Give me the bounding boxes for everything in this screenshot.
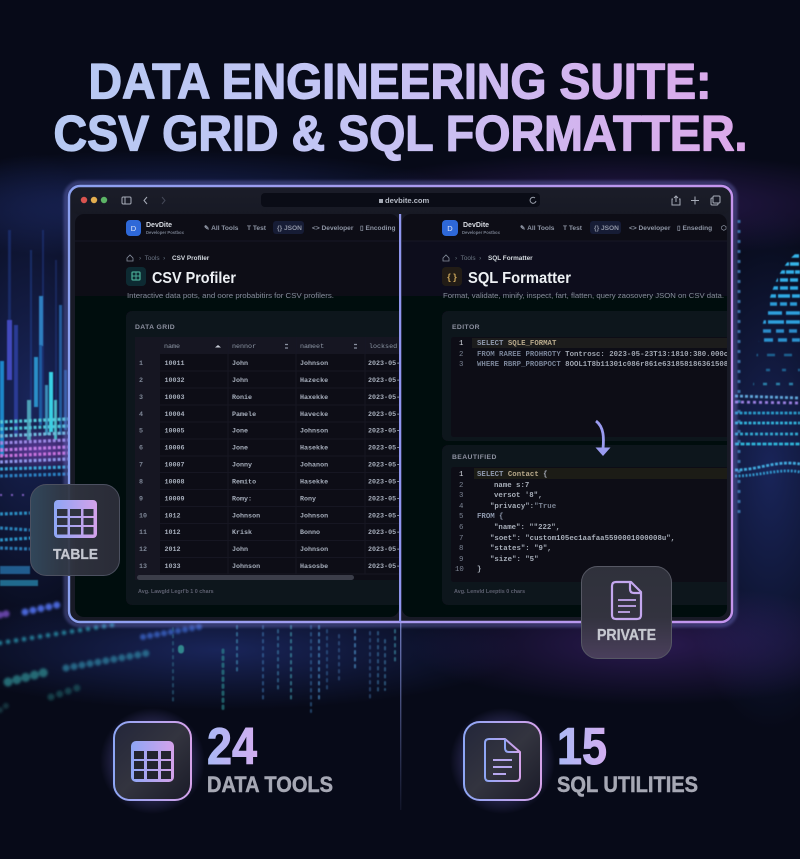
card: beautified: 7 (459, 535, 463, 543)
card: beautified (442, 445, 742, 605)
app header: ⬡ (721, 224, 727, 232)
app header: {} JSON (277, 225, 302, 232)
data table: Romy: (232, 496, 252, 504)
data table: 2023-05- (368, 478, 400, 486)
split divider (399, 214, 401, 622)
card: beautified: "size": "5" (490, 556, 538, 564)
card: beautified: 1 (459, 471, 464, 479)
number: 24: 24 (207, 718, 257, 776)
data table: Pamele (232, 411, 256, 419)
data table: Jonny (232, 462, 252, 470)
app header: <> Developer (629, 225, 671, 232)
data table: nameet (300, 343, 324, 351)
right data visualisation: globe (735, 220, 800, 515)
data table: Johnson (232, 512, 260, 520)
card: beautified: 3 (459, 492, 463, 500)
breadcrumb: CSV Profiler (172, 255, 210, 262)
card: beautified: "name": ""222", (494, 524, 560, 532)
card: beautified: "soet": "custom105ec1aafaa5590001000008u", (490, 535, 675, 543)
data table: Hasekke (300, 444, 328, 452)
card: beautified: name s:7 (494, 482, 529, 490)
data table: 2 (139, 377, 143, 385)
heading: SQL Formatter: SQL Formatter (468, 270, 571, 287)
breadcrumb (443, 255, 533, 262)
icon: table (54, 500, 97, 538)
app header (126, 220, 396, 236)
data table: 11 (139, 529, 147, 537)
data table: John (232, 377, 248, 385)
card: beautified: 6 (459, 524, 463, 532)
card: beautified: 4 (459, 503, 464, 511)
center divider line (400, 620, 401, 810)
browser toolbar: devbite.com (385, 196, 430, 205)
data table: 3 (139, 394, 143, 402)
card: editor: FROM RAREE PROHROTY Tontrosc: 2023-05-23T13:1810:380.000c (477, 351, 728, 359)
data table: 2023-05- (368, 411, 400, 419)
data table: John (232, 546, 248, 554)
data table: 2023-05- (368, 546, 400, 554)
data table: Johnson (300, 512, 328, 520)
breadcrumb: SQL Formatter (488, 255, 533, 262)
card: data grid: DATA GRID (135, 324, 175, 331)
badge: TABLE: TABLE (53, 546, 98, 563)
app header: ▯ Enseding (677, 225, 712, 232)
data table: 2012 (164, 546, 181, 554)
data table: Jone (232, 428, 248, 436)
data table: 1012 (164, 512, 181, 520)
data table: Rony (300, 496, 316, 504)
card: beautified: SELECT Contact { (477, 471, 548, 479)
breadcrumb: › Tools › (139, 255, 165, 262)
data table: Johanon (300, 462, 328, 470)
data table: 2023-05- (368, 496, 400, 504)
data table: 2023-05- (368, 394, 400, 402)
app header: Developer Postbox (462, 230, 501, 235)
data table: 7 (139, 462, 143, 470)
panel: SQL Formatter (401, 214, 742, 617)
icon: braces (442, 267, 462, 286)
card: beautified: versot '8", (494, 492, 542, 500)
data table: Krisk (232, 529, 252, 537)
data table: John (232, 360, 248, 368)
data table: Hasosbe (300, 563, 328, 571)
icon tile: document (450, 708, 555, 814)
panel: CSV Profiler (75, 214, 416, 617)
data table: Hazecke (300, 377, 328, 385)
data table: 2023-05- (368, 512, 400, 520)
app header (442, 220, 727, 236)
icon: document (612, 582, 641, 619)
data table: Johnson (300, 428, 328, 436)
data table: 10 (139, 512, 147, 520)
data table: 10007 (164, 462, 185, 470)
card: editor (442, 311, 742, 441)
app header: D (447, 224, 453, 233)
card: editor: 1 (459, 340, 464, 348)
app header: T Test (247, 225, 267, 232)
data table: 9 (139, 496, 143, 504)
data table: 4 (139, 411, 143, 419)
data table: 2023-05- (368, 377, 400, 385)
app header: D (131, 224, 137, 233)
data table: 5 (139, 428, 143, 436)
arrow: editor to beautified (596, 421, 610, 456)
data table: nennor (232, 343, 256, 351)
card: beautified: Avg. Lenvld Leeptis 0 chars (454, 589, 525, 595)
data table: 6 (139, 444, 143, 452)
data table: Johnson (300, 360, 328, 368)
data table: 10011 (164, 360, 185, 368)
app header: <> Developer (312, 225, 354, 232)
data table: 10004 (164, 411, 185, 419)
data table: Havecke (300, 411, 328, 419)
data table: Johnson (232, 563, 260, 571)
left data visualisation (0, 230, 68, 586)
app header: {} JSON (594, 225, 619, 232)
table footer: Avg. Lawgld Legrl'b 1 0 chars (138, 589, 214, 595)
label: data tools: DATA TOOLS (207, 772, 333, 797)
card: beautified: 5 (459, 513, 463, 521)
icon tile: table (100, 708, 205, 814)
title: CSV GRID & SQL FORMATTER. (54, 106, 748, 162)
browser toolbar (70, 187, 731, 215)
card: beautified: 8 (459, 545, 463, 553)
data table: Bonno (300, 529, 320, 537)
app header: DevDite (463, 222, 489, 229)
heading: CSV Profiler: CSV Profiler (152, 270, 236, 287)
number: 15: 15 (557, 718, 607, 776)
card: beautified: "states": "9", (490, 545, 552, 553)
data table: 10009 (164, 496, 185, 504)
app header: Developer Postbox (146, 230, 185, 235)
data table: 2023-05- (368, 360, 400, 368)
browser window (66, 183, 742, 625)
data table: 2023-05- (368, 563, 400, 571)
data table: Johnson (300, 546, 328, 554)
card: beautified: } (477, 566, 481, 574)
card: editor: 2 (459, 351, 463, 359)
data table: 12 (139, 546, 147, 554)
data table (135, 337, 405, 580)
data table: name (164, 343, 180, 351)
badge: TABLE (30, 484, 120, 576)
label: sql utilities: SQL UTILITIES (557, 772, 698, 797)
app header: ✎ All Tools (520, 224, 555, 232)
card: editor: 3 (459, 361, 463, 369)
stat: 24 data tools (100, 708, 333, 814)
card: beautified: 9 (459, 556, 463, 564)
data table: locksed (369, 343, 397, 351)
app header: ▯ Encoding (360, 225, 396, 232)
card: editor: EDITOR (452, 324, 480, 331)
data table: 10003 (164, 394, 185, 402)
card: beautified: "privacy":"True (490, 503, 557, 511)
data table: Ronie (232, 394, 252, 402)
app header: DevDite (146, 222, 172, 229)
app header: ✎ All Tools (204, 224, 239, 232)
breadcrumb (127, 255, 210, 262)
card: editor: SELECT SQLE_FORMAT (477, 340, 557, 348)
data table: 2023-05- (368, 444, 400, 452)
card: editor: WHERE RBRP_PROBPOCT 8OOL1T8b11301c086r861e631858186361508 (477, 361, 729, 369)
stat: 15 sql utilities (450, 708, 698, 814)
data table: 1033 (164, 563, 181, 571)
title (54, 54, 748, 162)
card: beautified: 2 (459, 482, 463, 490)
title: DATA ENGINEERING SUITE: (88, 54, 712, 110)
data table: Remito (232, 478, 256, 486)
icon: braces: { } (447, 272, 457, 282)
data table: 10006 (164, 444, 185, 452)
icon: grid (126, 267, 146, 286)
description: Format, validate, minify, inspect, fart, flatten, query zaosovery JSON on CSV data. (443, 291, 724, 300)
bottom data dots (0, 604, 199, 710)
data table: 2023-05- (368, 428, 400, 436)
app header: T Test (563, 225, 583, 232)
data table: 1012 (164, 529, 181, 537)
data table: 8 (139, 478, 143, 486)
data table: 13 (139, 563, 147, 571)
badge: PRIVATE: PRIVATE (597, 627, 656, 644)
data table: 1 (139, 360, 143, 368)
data table: 10008 (164, 478, 185, 486)
data table: 2023-05- (368, 462, 400, 470)
card: beautified: BEAUTIFIED (452, 454, 497, 461)
card: beautified: FROM { (477, 513, 503, 521)
data table: Jone (232, 444, 248, 452)
data table: Hasekke (300, 478, 328, 486)
card: beautified: 10 (455, 566, 464, 574)
data table: 2023-05- (368, 529, 400, 537)
data table: 10005 (164, 428, 185, 436)
badge: PRIVATE (582, 566, 672, 658)
data table: Haxekke (300, 394, 328, 402)
data table: 10032 (164, 377, 185, 385)
description: Interactive data pots, and oore probabitirs for CSV profilers. (127, 291, 334, 300)
card: data grid (126, 311, 416, 605)
breadcrumb: › Tools › (455, 255, 481, 262)
window frame border (69, 186, 732, 622)
